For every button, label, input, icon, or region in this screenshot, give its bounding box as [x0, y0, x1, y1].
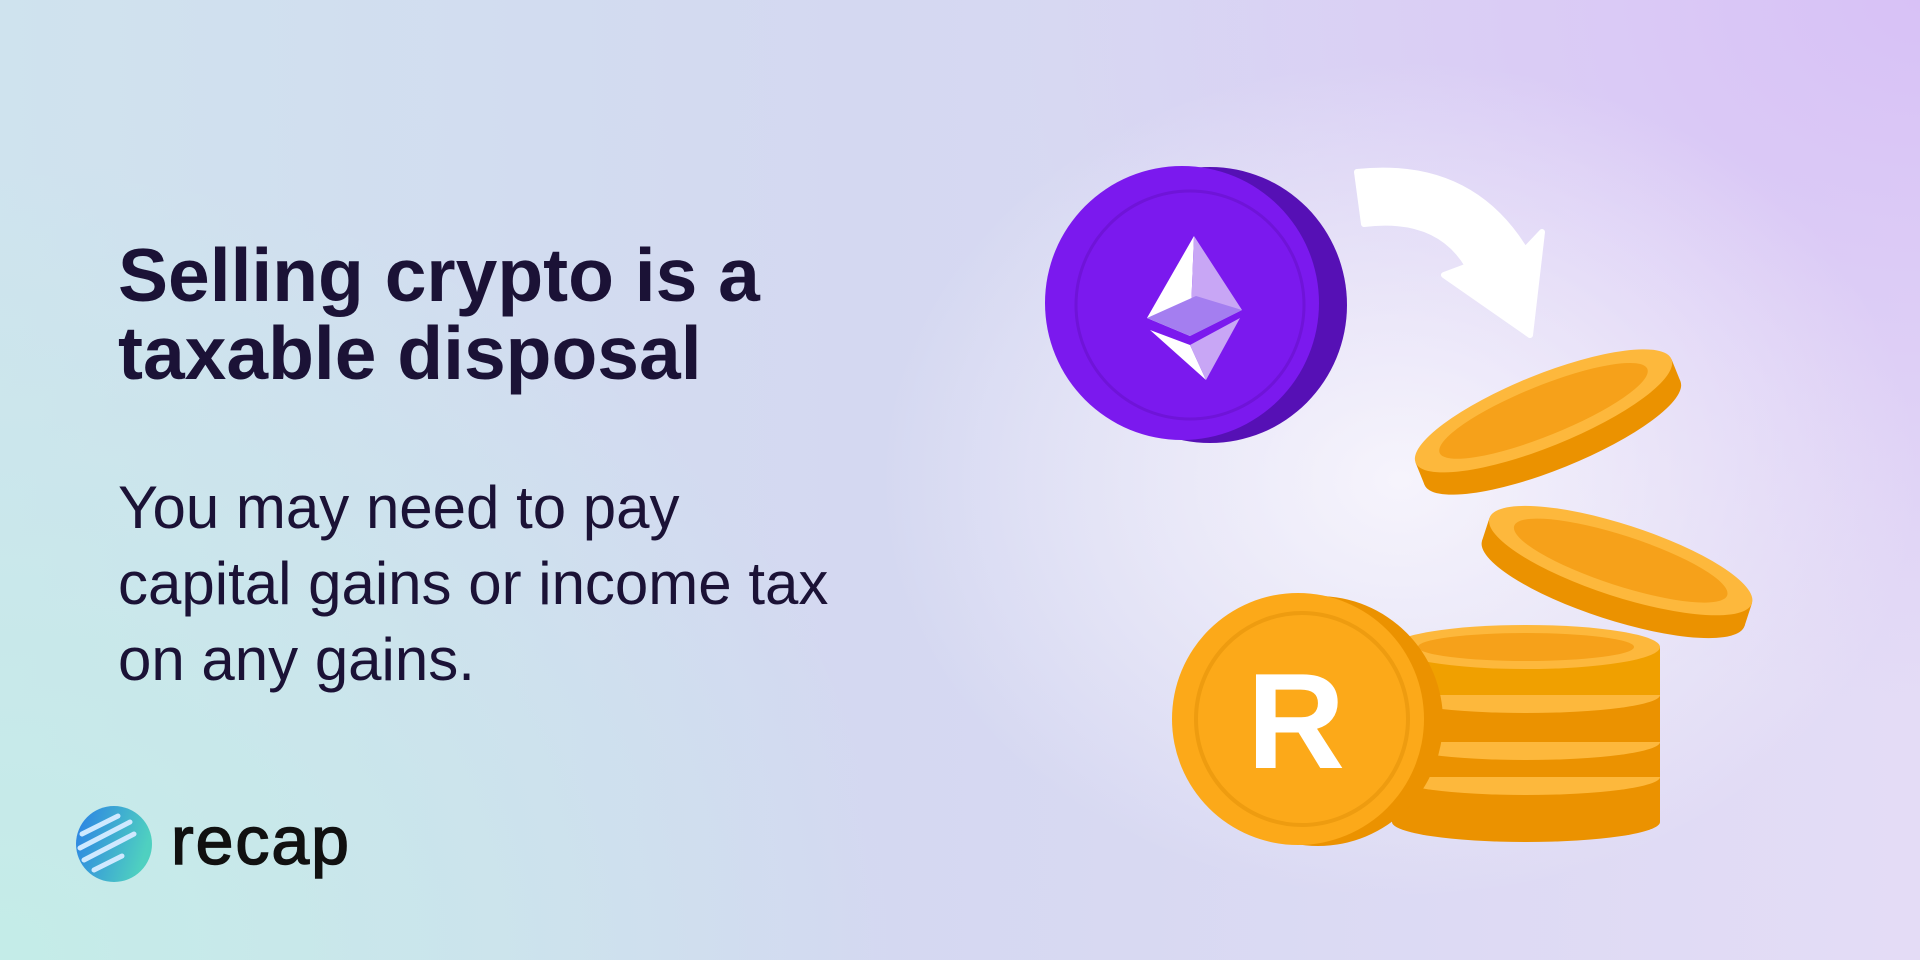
arrow: curved — [1357, 171, 1542, 335]
icon: coin stack — [1392, 625, 1660, 842]
body text: on any gains. — [118, 626, 475, 693]
icon: falling gold coin 1 — [1402, 326, 1694, 518]
icon: falling gold coin 2 — [1471, 484, 1763, 660]
title: taxable disposal — [118, 311, 702, 395]
logo: recap: recap — [171, 804, 349, 879]
icon: ethereum coin — [1045, 166, 1347, 443]
icon: R coin — [1172, 593, 1443, 846]
body text: capital gains or income tax — [118, 550, 828, 617]
logo: recap — [76, 804, 349, 882]
title: Selling crypto is a — [118, 233, 760, 317]
body text — [118, 474, 828, 693]
title — [118, 233, 760, 395]
icon: R coin: R — [1247, 645, 1345, 797]
body text: You may need to pay — [118, 474, 680, 541]
